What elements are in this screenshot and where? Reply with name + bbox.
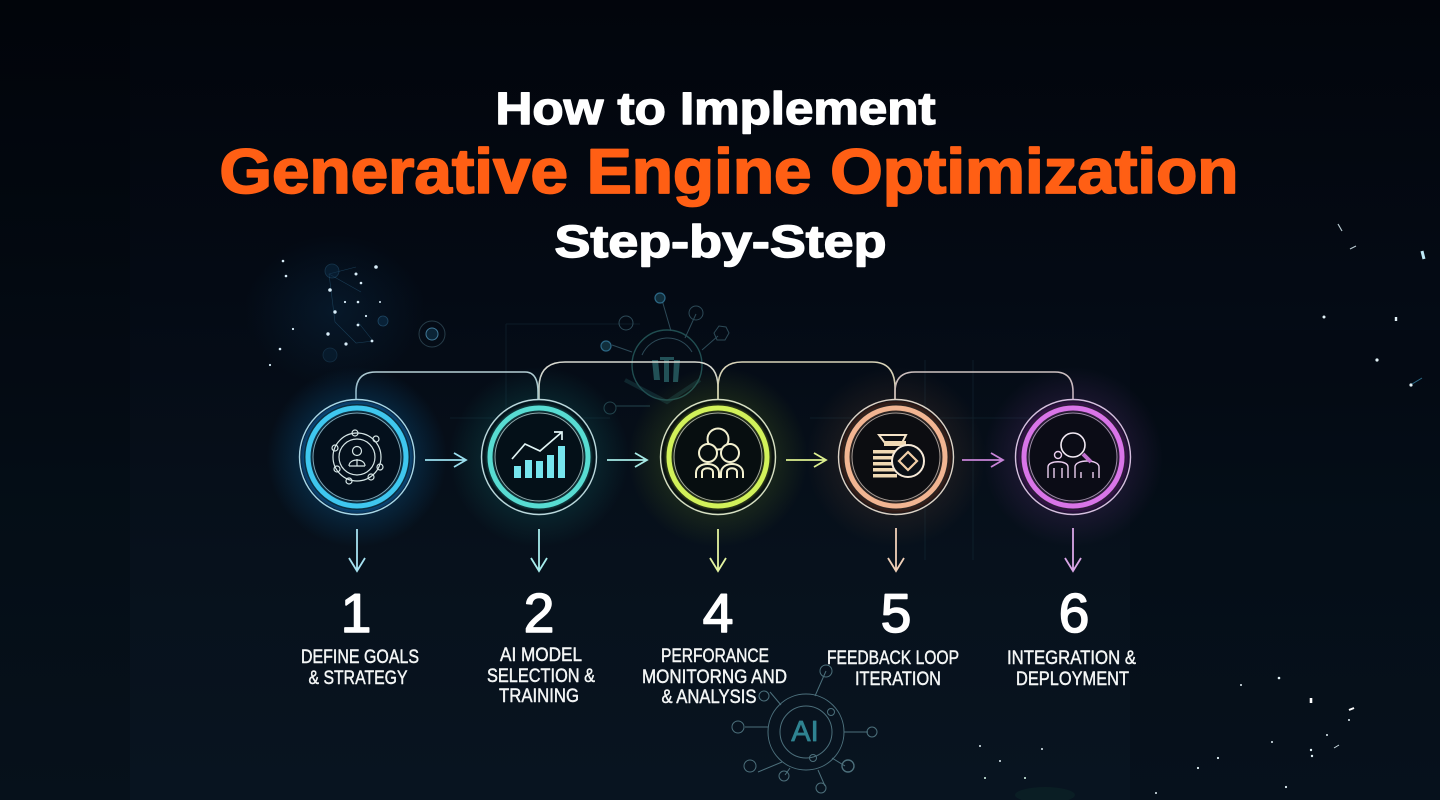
- step 2: ai model: [449, 367, 629, 547]
- down arrow 1: [349, 529, 365, 571]
- step label 2: 2: [524, 582, 554, 644]
- ring 1: [300, 400, 414, 514]
- star constellation top left: [245, 235, 445, 385]
- step 1: define goals: [267, 367, 447, 547]
- title line 2: Generative Engine Optimization: [220, 137, 1238, 207]
- step 6: integration: [983, 367, 1163, 547]
- step label 4: & ANALYSIS: [662, 686, 756, 708]
- step label 1: DEFINE GOALS: [301, 646, 419, 668]
- bottom glow: [984, 777, 1075, 800]
- background hub icon top center: [601, 293, 729, 414]
- horizontal arrow 2: [607, 453, 647, 467]
- horizontal arrow 3: [786, 453, 826, 467]
- background hub icon AI bottom center: AI: [791, 716, 819, 748]
- step label 6: DEPLOYMENT: [1016, 668, 1129, 690]
- icon: two people: [1048, 433, 1099, 478]
- step label 4: 4: [703, 582, 733, 644]
- step label 6: INTEGRATION &: [1007, 647, 1136, 669]
- icon: coins: [873, 435, 924, 478]
- horizontal arrow 4: [962, 453, 1003, 467]
- icon: people network: [332, 430, 383, 484]
- step 5: feedback loop: [806, 367, 986, 547]
- step label 2: TRAINING: [499, 685, 579, 707]
- step label 1: [301, 582, 419, 689]
- step 3: performance: [628, 367, 808, 547]
- step label 2: SELECTION &: [487, 665, 595, 687]
- down arrow 3: [710, 529, 726, 571]
- step label 5: ITERATION: [855, 668, 941, 690]
- step label 4: PERFORANCE: [661, 645, 769, 667]
- step label 5: FEEDBACK LOOP: [827, 647, 959, 669]
- ring 3: [660, 400, 776, 514]
- icon: team: [696, 428, 743, 478]
- step label 1: 1: [341, 582, 371, 644]
- title line 3: Step-by-Step: [554, 216, 886, 267]
- step label 4: MONITORNG AND: [642, 666, 787, 688]
- connector brackets: [356, 362, 1073, 399]
- step label 2: AI MODEL: [500, 644, 582, 666]
- down arrow 2: [531, 529, 547, 571]
- step label 2: [487, 582, 595, 707]
- ring 2: [482, 400, 596, 514]
- step label 4: [642, 582, 787, 708]
- background hub icon AI bottom center: [732, 665, 877, 793]
- scattered stars right: [979, 224, 1424, 794]
- title block: [220, 83, 1238, 267]
- icon: growth chart: [512, 432, 565, 478]
- down arrow 5: [1065, 528, 1081, 571]
- horizontal arrow 1: [425, 453, 466, 467]
- ring 5: [1016, 400, 1130, 514]
- step label 1: & STRATEGY: [308, 667, 408, 689]
- down arrow 4: [888, 528, 904, 571]
- title line 1: How to Implement: [496, 83, 936, 134]
- step label 6: 6: [1059, 582, 1089, 644]
- step label 6: [1007, 582, 1136, 690]
- ring 4: [838, 400, 954, 514]
- step label 5: [827, 582, 959, 690]
- step label 5: 5: [881, 582, 911, 644]
